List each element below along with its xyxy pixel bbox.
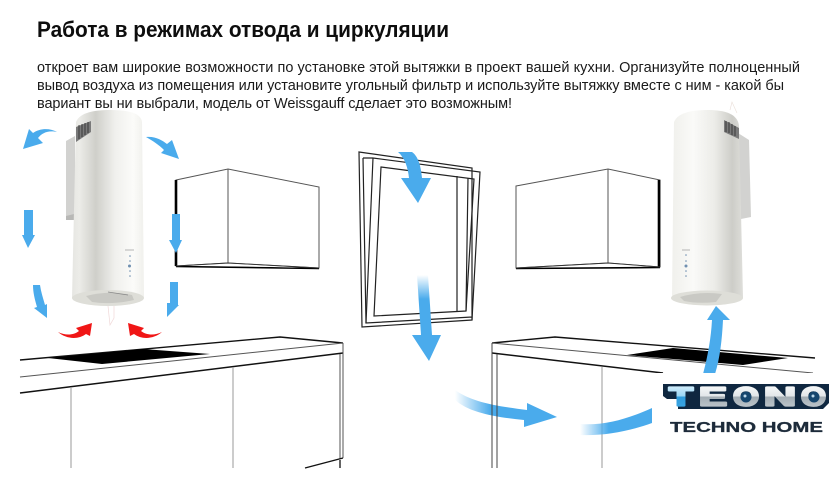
logo wordmark: O: [801, 382, 826, 412]
arrow: lower left curved: [33, 285, 47, 318]
arrow: window middle: [412, 275, 441, 361]
panel: left kitchen counter: [20, 337, 343, 468]
arrow: up into right hood: [703, 306, 730, 374]
panel: left wall cabinet: [176, 169, 319, 268]
panel: window: [359, 152, 480, 327]
intro text block: [37, 60, 800, 112]
logo wordmark: [663, 382, 829, 436]
intro text block: вариант вы ни выбрали, модель от Weissgauff сделает это возможным!: [37, 96, 512, 112]
title: Работа в режимах отвода и циркуляции: [37, 17, 449, 42]
arrow: lower right curved: [167, 282, 179, 317]
logo wordmark: T: [669, 382, 693, 412]
logo wordmark: E: [699, 382, 727, 412]
logo wordmark: TECHNO HOME: [670, 420, 823, 436]
arrow: floor to right: [455, 390, 557, 427]
intro text block: вывод воздуха из помещения или установите угольный фильтр и используйте вытяжку вместе с ним - какой бы: [37, 78, 784, 94]
arrow: right down: [169, 214, 182, 253]
arrow: left down: [22, 210, 35, 248]
panel: right wall cabinet: [516, 169, 660, 268]
logo backdrop and curved arrow toward right hood: [580, 373, 840, 441]
intro text block: откроет вам широкие возможности по установке этой вытяжки в проект вашей кухни. Организуйте полноценный: [37, 60, 800, 76]
arrow: red right: [128, 323, 162, 338]
arrow: red left: [58, 323, 92, 338]
icon: left cylindrical hood: [66, 110, 144, 325]
icon: right cylindrical hood: [671, 102, 751, 306]
arrow: left top-left curved: [23, 129, 57, 149]
arrow: left top-right curved: [146, 137, 179, 159]
panel: right kitchen counter: [492, 337, 815, 468]
arrow: window top: [398, 152, 431, 203]
logo wordmark: O: [733, 382, 759, 412]
logo wordmark: N: [764, 382, 796, 412]
